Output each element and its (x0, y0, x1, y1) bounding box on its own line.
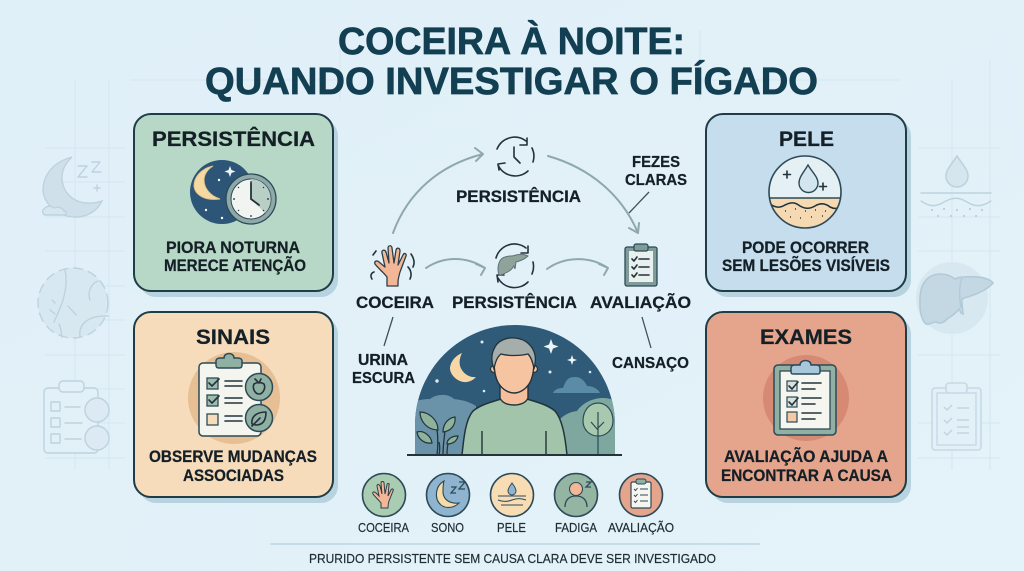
caption: observe mudanças (149, 448, 317, 485)
badge labels: AVALIAÇÃO (608, 521, 674, 535)
panel: persistência (134, 114, 338, 297)
background icon: clipboard (932, 383, 981, 450)
heading: exames: EXAMES (760, 325, 852, 349)
caption: observe mudanças: OBSERVE MUDANÇAS (149, 448, 317, 466)
badge: avaliação (620, 474, 662, 516)
background icon: checklist (44, 381, 109, 453)
label: urina escura (352, 352, 415, 387)
badge labels: PELE (497, 521, 526, 535)
background icon: moon with zzz (43, 157, 102, 217)
label: cansaço: CANSAÇO (612, 355, 689, 372)
label: urina escura: URINA (358, 352, 408, 369)
heading: pele: PELE (779, 127, 834, 151)
label: coceira: COCEIRA (356, 293, 434, 312)
caption: pode ocorrer (722, 239, 890, 275)
label: urina escura: ESCURA (352, 370, 415, 387)
badge: sono (426, 474, 470, 516)
figure: person (462, 338, 567, 455)
panel: pele (706, 114, 911, 297)
arrow: top persistência to avaliação (548, 156, 639, 233)
arrow: coceira to liver (426, 259, 485, 275)
caption: pode ocorrer: PODE OCORRER (742, 239, 869, 257)
footer note: PRURIDO PERSISTENTE SEM CAUSA CLARA DEVE SER INVESTIGADO (309, 551, 716, 566)
icon: clipboard checklist (763, 355, 849, 441)
caption: avaliação ajuda (721, 446, 892, 485)
label: avaliação: AVALIAÇÃO (590, 292, 691, 312)
connector: fezes claras (629, 192, 649, 213)
caption: observe mudanças: ASSOCIADAS (183, 467, 284, 485)
title: COCEIRA À NOITE: (338, 19, 685, 63)
label: fezes claras: CLARAS (625, 172, 687, 189)
connector: cansaço (642, 317, 651, 348)
icon: cycle clock (497, 137, 534, 176)
label: persistência middle: PERSISTÊNCIA (452, 293, 577, 312)
background icon: water drop on skin (921, 156, 991, 216)
badge labels: FADIGA (555, 521, 598, 535)
badge labels: SONO (431, 521, 464, 535)
panel: sinais (134, 312, 338, 503)
icon: evaluation clipboard (625, 244, 657, 286)
badge: pele (490, 474, 534, 516)
title: QUANDO INVESTIGAR O FÍGADO (205, 59, 818, 103)
caption: piora noturna (164, 239, 306, 275)
caption: piora noturna: PIORA NOTURNA (166, 239, 300, 257)
arrow: coceira to top persistência (393, 148, 483, 233)
title (205, 19, 818, 103)
icon: moon and clock (190, 160, 276, 224)
badge labels: COCEIRA (358, 521, 410, 535)
arrow: liver to avaliação (547, 259, 608, 275)
illustration: person at night (407, 320, 622, 460)
heading: sinais: SINAIS (196, 325, 270, 349)
caption: avaliação ajuda: AVALIAÇÃO AJUDA A (724, 446, 888, 466)
badge: fadiga (554, 474, 598, 516)
heading: persistência: PERSISTÊNCIA (152, 126, 315, 151)
panel: exames (706, 312, 911, 503)
background icon: scratched skin circle (38, 268, 108, 338)
icon: checklist with food and leaf (188, 352, 280, 444)
connector: urina escura (384, 317, 393, 346)
label: persistência top: PERSISTÊNCIA (456, 187, 581, 206)
icon: itching hand (371, 246, 414, 286)
caption: avaliação ajuda: ENCONTRAR A CAUSA (721, 467, 892, 485)
icon: skin cross-section with drop (768, 155, 842, 229)
badge: coceira (362, 474, 406, 516)
ground line (407, 454, 622, 456)
caption: pode ocorrer: SEM LESÕES VISÍVEIS (722, 255, 890, 275)
badge labels (358, 521, 674, 535)
label: fezes claras: FEZES (632, 154, 680, 171)
icon: liver cycle (496, 244, 534, 288)
caption: piora noturna: MERECE ATENÇÃO (164, 255, 306, 275)
background icon: liver (916, 262, 993, 334)
label: fezes claras (625, 154, 687, 189)
